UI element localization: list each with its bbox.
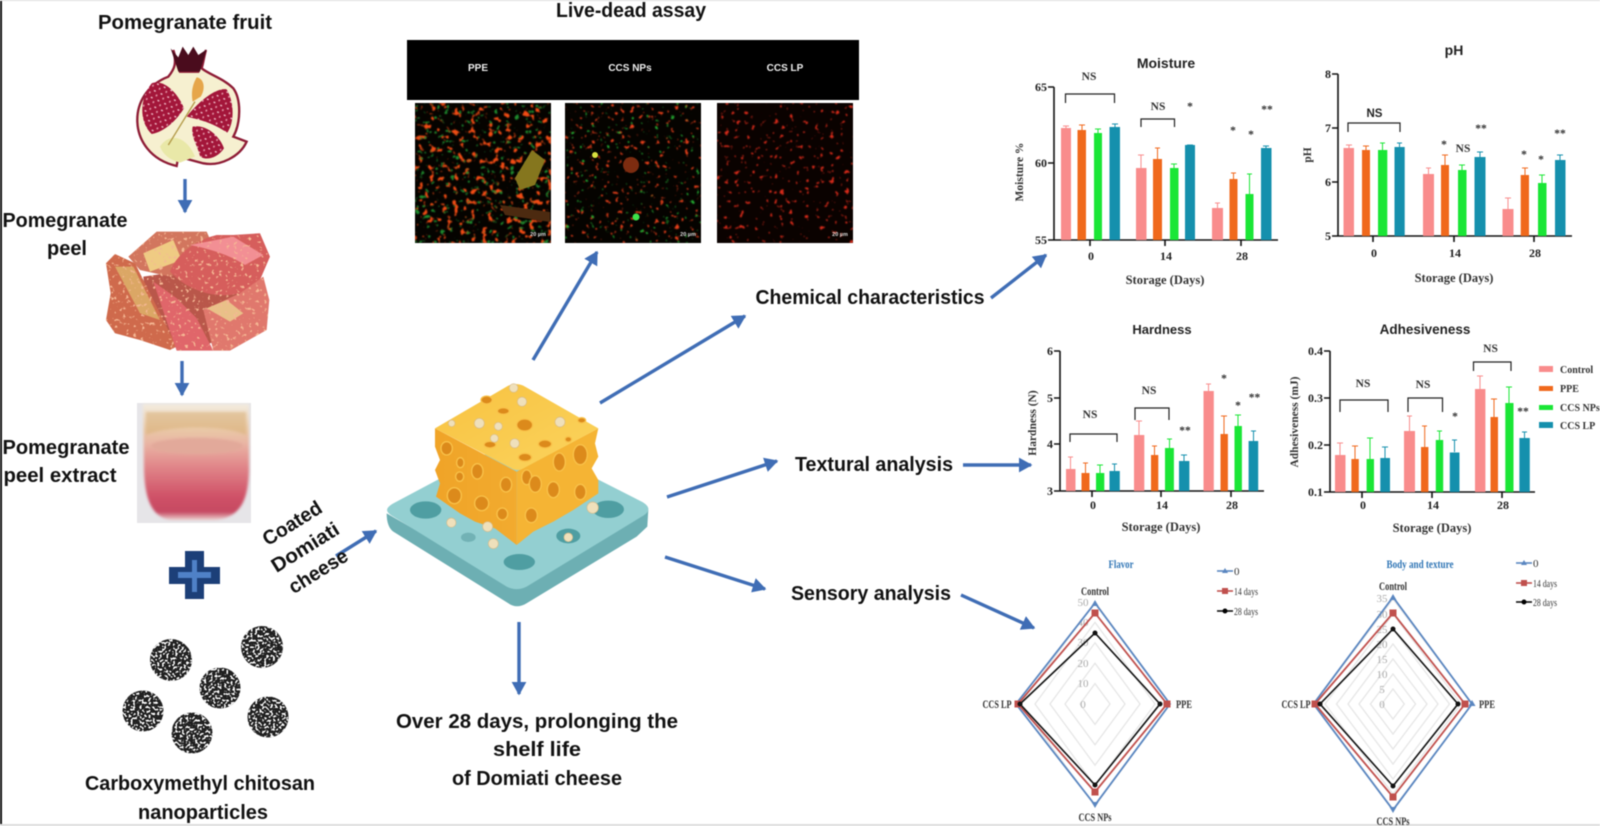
- label: pomegranate peel: peel: [47, 238, 87, 260]
- radar chart: body and texture: CCS LP: [1282, 697, 1310, 711]
- bar chart: adhesiveness: 0.1: [1308, 485, 1323, 499]
- arrow: fruit to peel: [183, 179, 187, 212]
- radar chart: flavor: 50: [1078, 597, 1089, 609]
- bar chart: moisture: [1014, 55, 1278, 287]
- radar chart: flavor: CCS NPs: [1078, 810, 1112, 824]
- bar chart: hardness: *: [1221, 373, 1227, 385]
- radar chart: flavor: CCS LP: [982, 697, 1012, 711]
- bar chart: hardness: **: [1179, 425, 1191, 437]
- radar chart: body and texture: 0: [1379, 699, 1385, 711]
- header bar with sample names: [407, 40, 859, 100]
- bar chart: moisture: Moisture: [1137, 55, 1195, 71]
- bar chart: hardness: 6: [1047, 344, 1053, 358]
- bar chart: pH: Storage (Days): [1415, 271, 1493, 285]
- bar chart: pH: **: [1475, 123, 1487, 135]
- label: pomegranate peel extract: peel extract: [4, 465, 117, 487]
- radar chart: body and texture: 10: [1376, 669, 1388, 681]
- bar chart: adhesiveness: NS: [1483, 343, 1498, 355]
- label: pomegranate peel: Pomegranate: [2, 210, 128, 232]
- bar chart: hardness: 5: [1047, 391, 1053, 405]
- bar chart: adhesiveness: Adhesiveness (mJ): [1289, 376, 1301, 468]
- legend: flavor storage days: 14 days: [1234, 586, 1258, 598]
- bar chart: pH: 6: [1325, 175, 1331, 189]
- bar chart: pH: 7: [1325, 121, 1331, 135]
- legend: body and texture storage days: 0: [1533, 558, 1539, 570]
- arrow: cheese to textural analysis: [667, 461, 777, 497]
- bar chart: hardness: Storage (Days): [1122, 520, 1200, 534]
- bar chart: hardness: NS: [1083, 409, 1097, 421]
- legend: body and texture storage days: 14 days: [1533, 578, 1557, 590]
- arrow: sensory analysis to radar charts: [961, 595, 1034, 628]
- legend: flavor storage days: 28 days: [1234, 606, 1258, 618]
- label: carboxymethyl chitosan nanoparticles: nanoparticles: [138, 802, 268, 824]
- radar chart: flavor: Flavor: [1108, 557, 1134, 571]
- bar chart: pH: 14: [1449, 246, 1461, 260]
- image: peel extract beaker: [137, 403, 251, 523]
- label: carboxymethyl chitosan nanoparticles: Carboxymethyl chitosan: [85, 773, 315, 795]
- text: shelf life conclusion: shelf life: [493, 739, 581, 761]
- arrow: cheese to chemical characteristics: [600, 316, 745, 403]
- arrow: coating to cheese: [336, 531, 376, 556]
- bar chart: adhesiveness: 0: [1360, 498, 1366, 512]
- radar chart: body and texture: [1282, 557, 1557, 826]
- micrograph: PPE: 20 µm: [530, 232, 546, 238]
- text: shelf life conclusion: of Domiati cheese: [452, 768, 622, 790]
- bar chart: adhesiveness: 28: [1497, 498, 1509, 512]
- bar chart: adhesiveness: *: [1452, 411, 1458, 423]
- bar chart: moisture: *: [1187, 101, 1193, 113]
- column: pomegranate preparation: [2, 12, 315, 824]
- label: coated Domiati cheese: [259, 497, 352, 599]
- header bar with sample names: CCS NPs: [608, 63, 652, 74]
- bar chart: pH: *: [1538, 154, 1544, 166]
- label: carboxymethyl chitosan nanoparticles: [85, 773, 315, 824]
- bar chart: pH: **: [1554, 128, 1566, 140]
- bar chart: moisture: 0: [1088, 249, 1094, 263]
- legend: body and texture storage days: [1516, 558, 1557, 609]
- micrograph: CCS NPs: [565, 103, 701, 243]
- bar chart: adhesiveness: Adhesiveness: [1380, 322, 1470, 337]
- label: pomegranate peel extract: Pomegranate: [2, 437, 130, 459]
- label: pomegranate peel: [2, 210, 128, 260]
- bar chart: hardness: [1027, 322, 1264, 534]
- bar chart: hardness: NS: [1142, 385, 1156, 397]
- bar chart: hardness: 28: [1226, 498, 1238, 512]
- bar chart: pH: [1302, 42, 1572, 285]
- radar chart: flavor: 0: [1080, 699, 1086, 711]
- bar chart: moisture: Moisture %: [1014, 143, 1026, 201]
- legend: bar chart treatments: Control: [1560, 365, 1593, 376]
- bar chart: pH: 0: [1371, 246, 1377, 260]
- radar chart: body and texture: Body and texture: [1386, 557, 1454, 571]
- radar chart: body and texture: 20: [1376, 639, 1388, 651]
- icon: plus sign: [170, 552, 219, 598]
- label: chemical characteristics: Chemical characteristics: [756, 287, 984, 309]
- micrograph: CCS LP: 20 µm: [832, 232, 848, 238]
- label: pomegranate peel extract: [2, 437, 130, 487]
- radar chart: flavor: 10: [1078, 678, 1089, 690]
- bar chart: moisture: 65: [1035, 80, 1047, 94]
- bar chart: adhesiveness: 0.4: [1308, 344, 1323, 358]
- bar chart: moisture: 14: [1160, 249, 1172, 263]
- radar chart: body and texture: 30: [1376, 609, 1388, 621]
- micrograph: CCS NPs: 20 µm: [680, 232, 696, 238]
- bar chart: adhesiveness: 0.3: [1308, 391, 1323, 405]
- radar chart: flavor: Control: [1081, 584, 1109, 598]
- icon: pomegranate peel pieces: [106, 232, 270, 351]
- label: coated Domiati cheese: Coated: [259, 497, 326, 551]
- label: textural analysis: Textural analysis: [795, 454, 953, 476]
- legend: bar chart treatments: [1539, 365, 1600, 432]
- panel: live-dead assay microscopy: [407, 40, 859, 243]
- bar chart: moisture: **: [1261, 104, 1273, 116]
- radar chart: flavor: 30: [1078, 637, 1089, 649]
- bar chart: adhesiveness: NS: [1416, 379, 1430, 391]
- bar chart: moisture: NS: [1082, 71, 1096, 83]
- micrograph: PPE: [415, 103, 551, 243]
- bar chart: pH: *: [1521, 149, 1527, 161]
- label: coated Domiati cheese: cheese: [285, 545, 352, 599]
- bar chart: adhesiveness: [1289, 322, 1535, 535]
- bar chart: pH: 28: [1529, 246, 1541, 260]
- bar chart: pH: NS: [1456, 143, 1470, 155]
- bar chart: adhesiveness: 0.2: [1308, 438, 1323, 452]
- bar chart: hardness: 4: [1047, 437, 1053, 451]
- heading: live-dead assay: Live-dead assay: [556, 0, 707, 22]
- radar chart: flavor: 40: [1078, 617, 1089, 629]
- radar chart: body and texture: PPE: [1479, 697, 1495, 711]
- radar chart: flavor: PPE: [1176, 697, 1192, 711]
- bar chart: hardness: **: [1249, 392, 1260, 404]
- bar chart: moisture: 55: [1035, 233, 1047, 247]
- arrow: cheese to live-dead assay: [533, 252, 597, 360]
- bar chart: pH: pH: [1445, 42, 1463, 58]
- bar chart: hardness: 0: [1090, 498, 1096, 512]
- radar chart: body and texture: 35: [1376, 593, 1388, 605]
- bar chart: moisture: 60: [1035, 156, 1047, 170]
- legend: bar chart treatments: CCS NPs: [1560, 403, 1600, 414]
- icon: pomegranate fruit: [137, 47, 247, 166]
- bar chart: adhesiveness: **: [1517, 406, 1529, 418]
- arrow: textural analysis to charts: [963, 463, 1031, 467]
- radar chart: flavor: 20: [1078, 658, 1089, 670]
- text: shelf life conclusion: [396, 711, 678, 790]
- heading: pomegranate fruit: Pomegranate fruit: [98, 12, 272, 34]
- bar chart: pH: pH: [1302, 147, 1314, 163]
- radar chart: body and texture: 5: [1379, 684, 1385, 696]
- bar chart: hardness: 3: [1047, 484, 1053, 498]
- bar chart: pH: 5: [1325, 229, 1331, 243]
- icon: coated cheese on plate: [387, 384, 648, 606]
- header bar with sample names: CCS LP: [767, 63, 804, 74]
- bar chart: pH: *: [1441, 139, 1447, 151]
- bar chart: pH: NS: [1367, 108, 1383, 120]
- legend: flavor storage days: [1217, 566, 1258, 618]
- bar chart: adhesiveness: 14: [1427, 498, 1439, 512]
- bar chart: pH: 8: [1325, 67, 1331, 81]
- micrograph: CCS LP: [717, 103, 853, 243]
- legend: bar chart treatments: PPE: [1560, 384, 1579, 395]
- legend: bar chart treatments: CCS LP: [1560, 421, 1595, 432]
- bar chart: moisture: *: [1230, 125, 1236, 137]
- bar chart: adhesiveness: Storage (Days): [1393, 521, 1471, 535]
- bar chart: hardness: Hardness: [1132, 322, 1192, 337]
- bar chart: moisture: NS: [1151, 101, 1165, 113]
- legend: flavor storage days: 0: [1234, 566, 1240, 578]
- legend: body and texture storage days: 28 days: [1533, 597, 1557, 609]
- radar chart: flavor: [982, 557, 1258, 824]
- header bar with sample names: PPE: [468, 63, 488, 74]
- bar chart: moisture: 28: [1236, 249, 1248, 263]
- bar chart: moisture: Storage (Days): [1126, 273, 1204, 287]
- icon: carboxymethyl chitosan nanoparticles: [122, 626, 288, 754]
- bar chart: hardness: Hardness (N): [1027, 390, 1039, 456]
- label: coated Domiati cheese: Domiati: [267, 518, 344, 577]
- arrow: cheese to shelf life: [517, 622, 521, 694]
- bar chart: hardness: 14: [1156, 498, 1168, 512]
- bar chart: adhesiveness: NS: [1356, 378, 1370, 390]
- radar chart: body and texture: 25: [1376, 624, 1388, 636]
- bar chart: hardness: *: [1235, 400, 1241, 412]
- arrow: peel to extract: [180, 361, 184, 395]
- radar chart: body and texture: Control: [1379, 579, 1407, 593]
- radar chart: body and texture: 15: [1376, 654, 1388, 666]
- bar chart: moisture: *: [1248, 129, 1254, 141]
- arrow: cheese to sensory analysis: [665, 557, 765, 589]
- arrow: chemical characteristics to charts: [991, 255, 1046, 298]
- text: shelf life conclusion: Over 28 days, prolonging the: [396, 711, 678, 733]
- label: sensory analysis: Sensory analysis: [791, 583, 951, 605]
